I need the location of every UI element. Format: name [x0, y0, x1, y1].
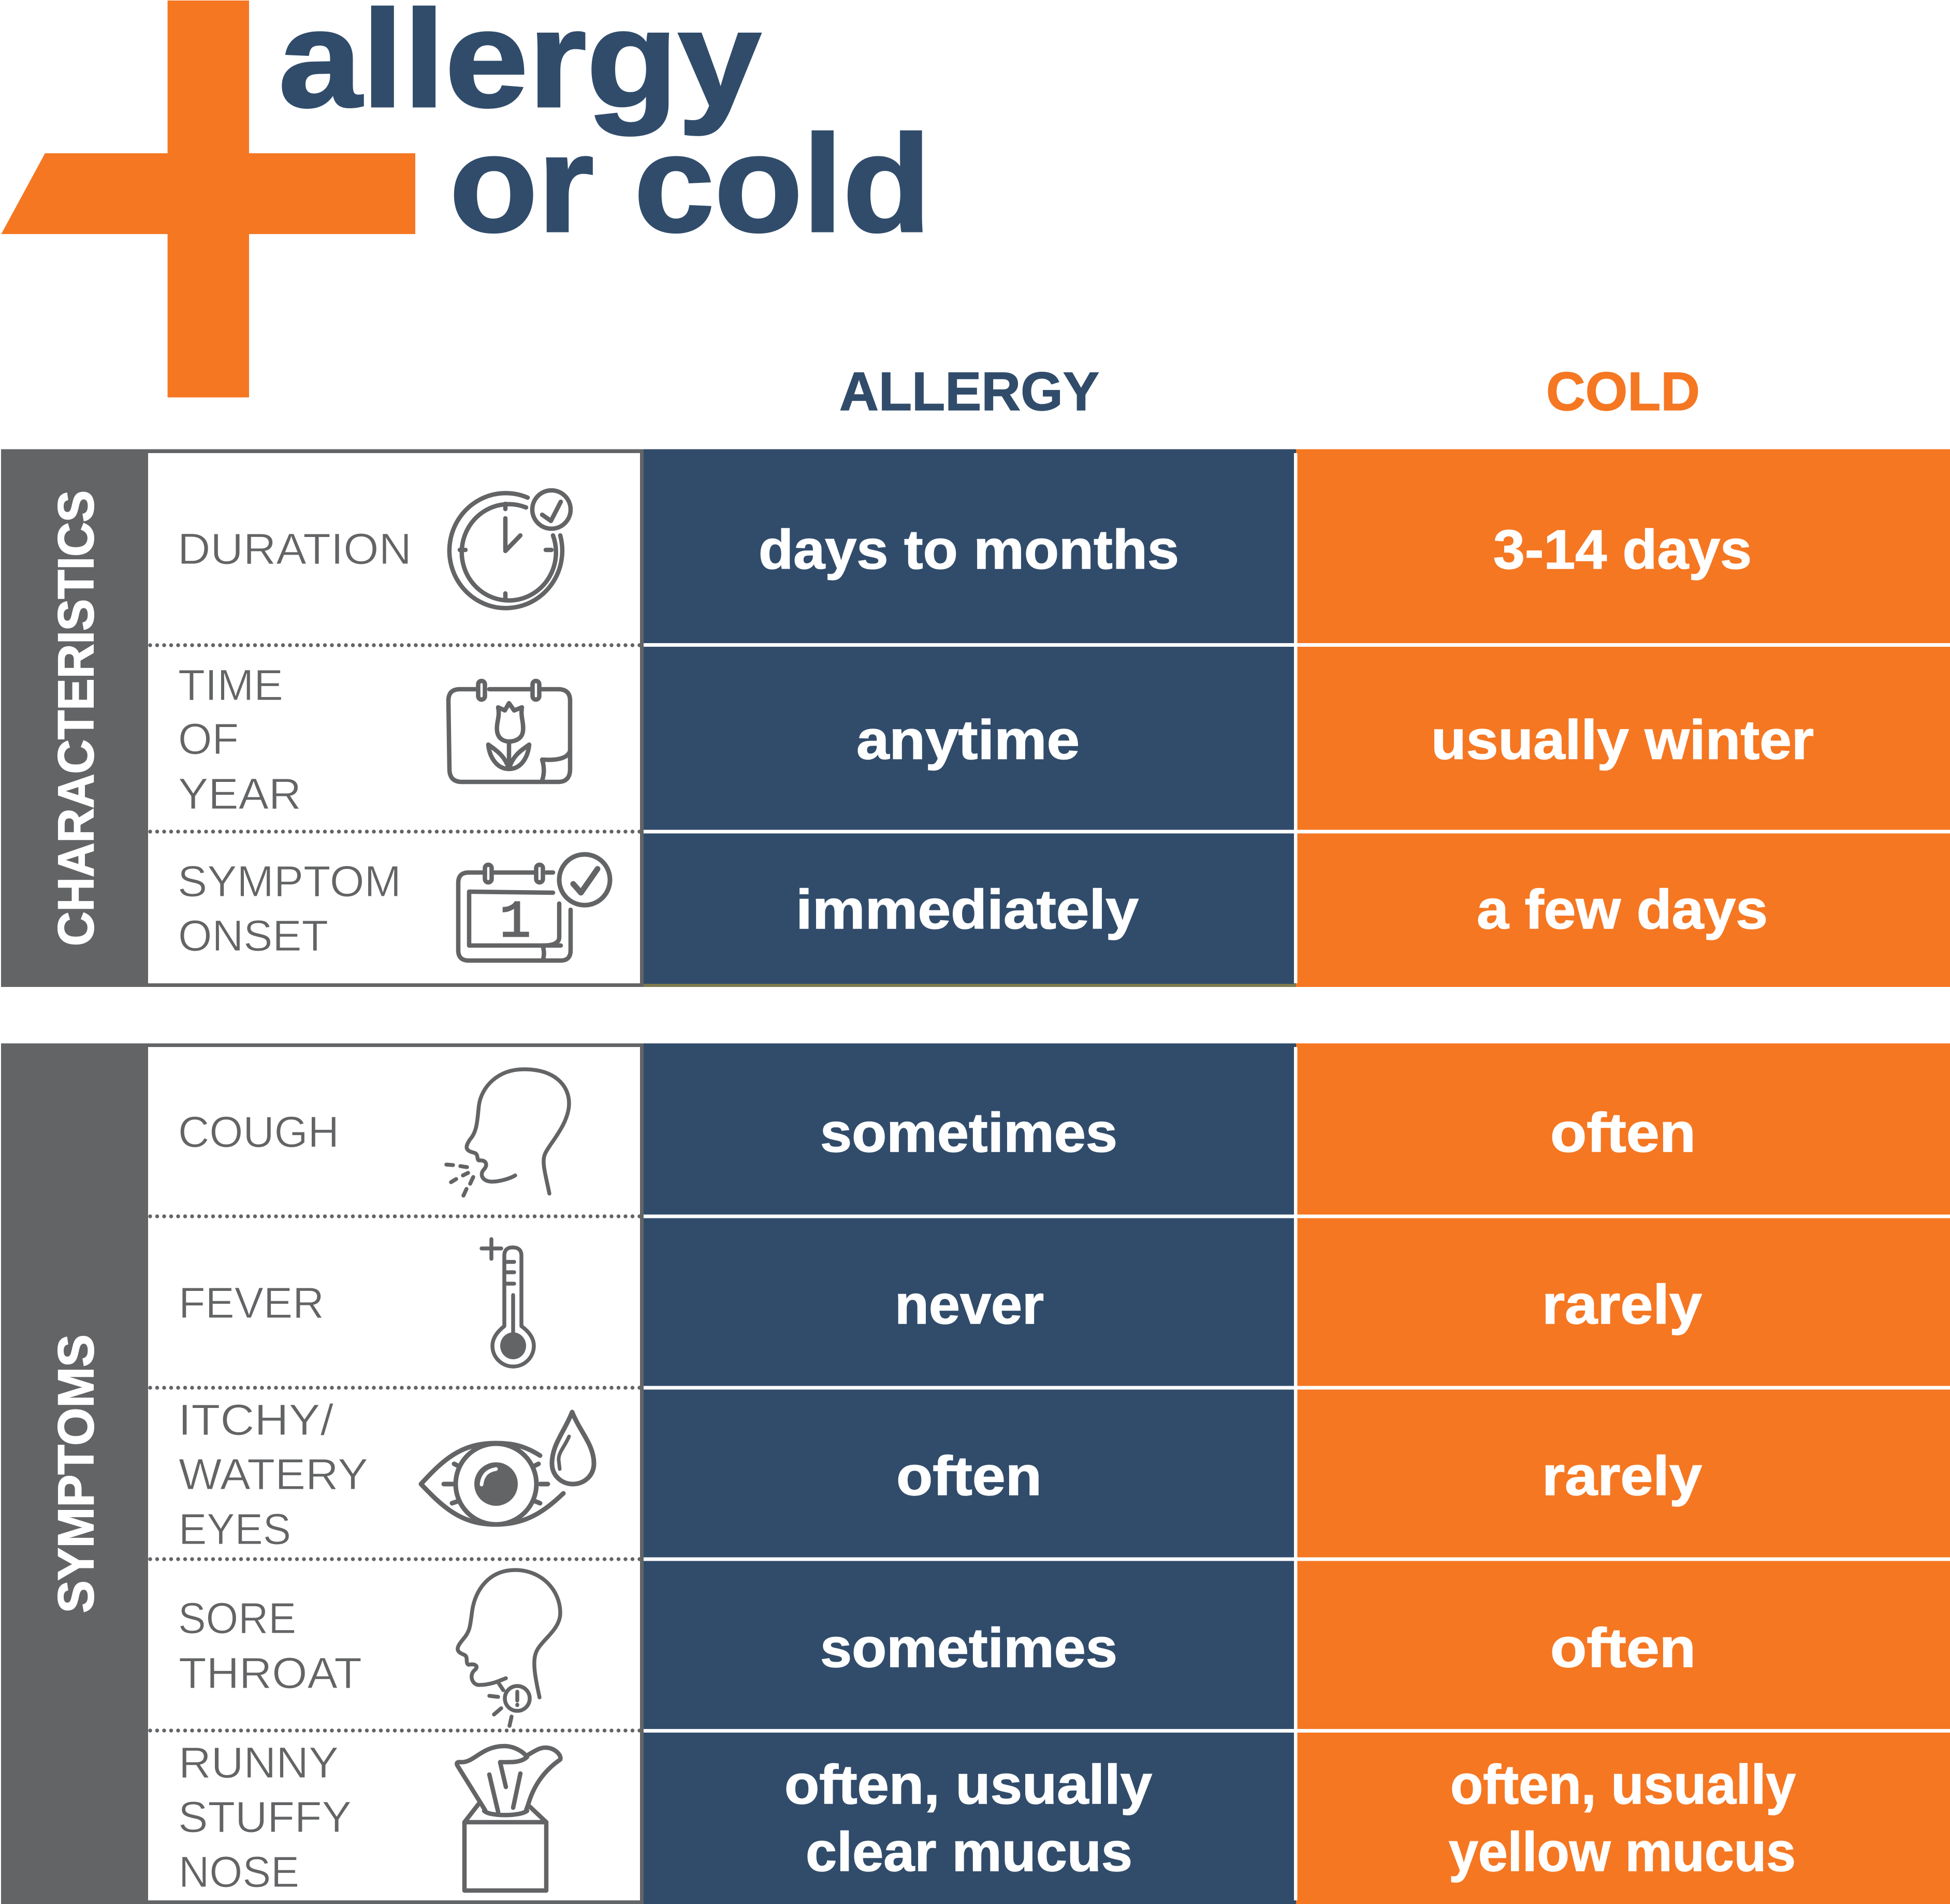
row label: runny stuffy nose: STUFFY	[178, 1793, 352, 1841]
icon: calendar with tulip	[448, 681, 570, 782]
icon: orange medical cross	[1, 1, 415, 398]
allergy values: characteristics: immediately	[796, 878, 1139, 940]
row label: symptom onset: SYMPTOM	[178, 857, 401, 906]
allergy values: symptoms: clear mucus	[806, 1821, 1132, 1883]
cold values: symptoms: yellow mucus	[1449, 1821, 1796, 1883]
column heading: cold: COLD	[1546, 361, 1700, 422]
icon: head coughing	[446, 1069, 569, 1196]
row label: runny stuffy nose: NOSE	[179, 1848, 299, 1896]
cold values: characteristics: 3-14 days	[1493, 518, 1752, 580]
panel: characteristics	[1, 449, 1950, 987]
title: or cold	[449, 107, 931, 261]
title	[279, 0, 931, 261]
cold values: symptoms: often	[1550, 1617, 1696, 1679]
row label: time of year	[178, 661, 301, 818]
cold values: characteristics	[1431, 518, 1814, 940]
row label: runny stuffy nose	[178, 1738, 352, 1896]
allergy values: symptoms: never	[895, 1273, 1044, 1335]
row label: symptom onset	[178, 857, 401, 960]
icon: head with sore throat	[458, 1570, 560, 1726]
allergy values: characteristics	[759, 518, 1179, 940]
cold values: characteristics: a few days	[1477, 878, 1768, 940]
row label: itchy watery eyes	[178, 1396, 368, 1553]
row label: sore throat: THROAT	[179, 1649, 362, 1697]
cold values: symptoms: rarely	[1542, 1273, 1702, 1335]
row label: duration: DURATION	[178, 525, 412, 573]
row label: cough: COUGH	[178, 1108, 339, 1156]
row label: itchy watery eyes: EYES	[179, 1505, 291, 1553]
allergy values: symptoms: often	[896, 1445, 1042, 1507]
row label: time of year: TIME	[178, 661, 283, 709]
row label: itchy watery eyes: WATERY	[179, 1450, 368, 1499]
column heading: allergy: ALLERGY	[839, 361, 1099, 422]
row label: runny stuffy nose: RUNNY	[179, 1738, 339, 1787]
allergy values: symptoms	[784, 1101, 1152, 1883]
row label: sore throat	[178, 1594, 362, 1697]
row label: fever: FEVER	[179, 1278, 324, 1327]
row label: time of year: YEAR	[178, 769, 301, 818]
allergy values: characteristics: days to months	[759, 518, 1179, 580]
cold values: characteristics: usually winter	[1431, 708, 1814, 771]
cold values: symptoms: rarely	[1542, 1445, 1702, 1507]
icon: calendar with number one and check	[458, 854, 610, 961]
allergy values: symptoms: often, usually	[784, 1753, 1152, 1815]
row label: time of year: OF	[178, 715, 239, 763]
allergy values: symptoms: sometimes	[820, 1101, 1117, 1164]
section label: symptoms: SYMPTOMS	[48, 1334, 104, 1613]
row label: itchy watery eyes: ITCHY/	[178, 1396, 334, 1444]
panel: symptoms	[1, 1043, 1950, 1904]
cold values: symptoms	[1449, 1101, 1796, 1883]
icon: tissue box	[457, 1746, 560, 1891]
row label: symptom onset: ONSET	[178, 911, 328, 960]
cold values: symptoms: often	[1550, 1101, 1696, 1164]
section label: characteristics: CHARACTERISTICS	[48, 490, 104, 946]
icon: thermometer	[482, 1239, 534, 1367]
icon: clock with check	[449, 490, 571, 608]
icon: calendar with number one and check: 1	[500, 894, 531, 952]
allergy values: characteristics: anytime	[856, 708, 1080, 771]
cold values: symptoms: often, usually	[1450, 1753, 1796, 1815]
icon: watery eye	[421, 1412, 594, 1524]
row label: sore throat: SORE	[178, 1594, 296, 1643]
allergy values: symptoms: sometimes	[820, 1617, 1117, 1679]
